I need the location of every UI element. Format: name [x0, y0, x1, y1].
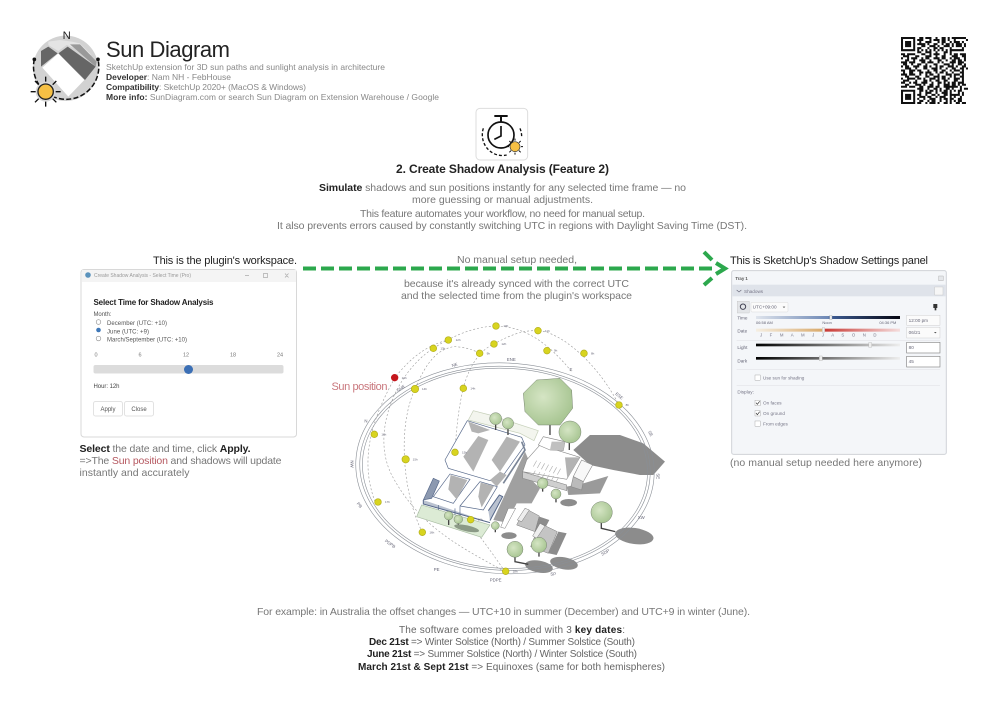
hour slider: 0 — [94, 352, 98, 358]
neighbouring house — [523, 437, 593, 491]
header information text: Developer: Nam NH - FebHouse — [106, 72, 231, 82]
hour slider: 6 — [138, 352, 142, 358]
key dates text block: June 21st => Summer Solstice (North) / Winter Solstice (South) — [367, 649, 637, 660]
panel: SketchUp shadow settings — [732, 271, 946, 454]
heading: plugin workspace: This is the plugin's workspace. — [153, 255, 297, 267]
month radio options: Month: — [94, 312, 112, 318]
compass labels: ESE — [614, 391, 624, 401]
compass labels: ENE — [507, 357, 516, 362]
logo: sun diagram — [31, 30, 100, 107]
header information text: SketchUp extension for 3D sun paths and sunlight analysis in architecture — [106, 62, 385, 72]
intro text block: Simulate shadows and sun positions instantly for any selected time frame — no — [319, 182, 686, 194]
intro text block: This feature automates your workflow, no need for manual setup. — [360, 208, 645, 220]
sun marker labels: 15h — [413, 457, 418, 461]
compass labels: PDPB — [384, 538, 397, 549]
display checkboxes: Use sun for shading — [763, 375, 805, 380]
key dates text block: Dec 21st => Winter Solstice (North) / Summer Solstice (South) — [369, 637, 635, 648]
sun position label: Sun position — [332, 381, 388, 393]
display checkboxes: From edges — [763, 421, 789, 426]
key dates text block — [358, 625, 665, 673]
sun marker labels — [381, 324, 629, 573]
sun position marker — [391, 374, 407, 381]
arrow annotation text: No manual setup needed, — [457, 254, 577, 266]
plugin instructions text: =>The Sun position and shadows will update — [80, 455, 282, 467]
sun marker labels: 8h — [591, 351, 595, 355]
icon: stopwatch and sun — [476, 108, 528, 160]
sun marker labels: 11h — [545, 329, 550, 333]
intro text block — [277, 182, 747, 232]
shadows section bar: Shadows — [744, 289, 764, 294]
panel: plugin window — [81, 270, 296, 437]
intro text block: It also prevents errors caused by constantly switching UTC in regions with Daylight Saving Time (DST). — [277, 220, 747, 232]
compass labels: SDP — [600, 548, 610, 557]
time and date sliders: 06:58 AM — [756, 320, 773, 325]
sun marker labels: 10h — [503, 324, 509, 328]
hour readout: Hour: 12h — [94, 384, 120, 390]
key dates text block: The software comes preloaded with 3 key dates: — [399, 625, 625, 636]
compass labels: SE — [647, 430, 654, 437]
hour slider: 24 — [277, 352, 283, 358]
header information text: More info: SunDiagram.com or search Sun Diagram on Extension Warehouse / Google — [106, 92, 439, 102]
sun position marker: 13h — [402, 376, 407, 380]
time and date sliders: Noon — [822, 320, 832, 325]
header information text: Compatibility: SketchUp 2020+ (MacOS & Windows) — [106, 82, 306, 92]
month radio options — [94, 312, 187, 344]
compass labels: N — [364, 419, 368, 424]
time and date sliders: Date — [737, 329, 748, 334]
compass labels — [350, 357, 661, 583]
light and dark sliders: Light — [737, 345, 748, 350]
compass rings — [350, 355, 660, 581]
month radio options: June (UTC: +9) — [107, 330, 149, 336]
plugin instructions text: Select the date and time, click Apply. — [80, 443, 251, 455]
sun marker labels: 14h — [470, 386, 476, 390]
plugin instructions text: instantly and accurately — [80, 467, 190, 479]
sun path diagram — [350, 323, 665, 583]
sun marker labels: 16h — [429, 530, 435, 534]
compass labels: NNE — [396, 384, 406, 393]
panel caption: (no manual setup needed here anymore) — [730, 457, 922, 469]
lower wing — [423, 474, 503, 523]
sun marker labels: 9h — [487, 351, 490, 355]
time and date sliders: 04:36 PM — [879, 320, 896, 325]
small outbuildings — [501, 508, 557, 553]
time and date sliders — [737, 315, 940, 338]
QR code — [901, 38, 968, 103]
sun marker labels: 12h — [456, 338, 461, 342]
compass labels: E — [570, 367, 573, 372]
trees — [444, 378, 615, 564]
lots — [417, 505, 490, 537]
time zone selector — [737, 301, 937, 313]
key dates text block: March 21st & Sept 21st => Equinoxes (same for both hemispheres) — [358, 662, 665, 673]
sun marker labels: 15h — [462, 450, 467, 454]
arrow: plugin to SketchUp — [303, 252, 725, 285]
heading: shadow settings panel: This is SketchUp's Shadow Settings panel — [730, 255, 928, 267]
section heading: 2. Create Shadow Analysis (Feature 2) — [396, 162, 609, 176]
sun marker labels: 18h — [513, 569, 518, 573]
apply and close buttons — [94, 402, 154, 416]
upper wing — [445, 421, 525, 487]
compass labels: SP — [550, 572, 556, 577]
apply and close buttons: Apply — [100, 407, 116, 413]
window title bar: Create Shadow Analysis - Select Time (Pro) — [94, 273, 191, 279]
main house — [417, 411, 538, 537]
sun marker labels: 8h — [626, 403, 629, 407]
time and date sliders: 06/21 — [909, 330, 921, 335]
display checkboxes: Display: — [737, 390, 754, 395]
sun marker labels: 17h — [385, 500, 390, 504]
apply and close buttons: Close — [131, 407, 147, 413]
title: Sun Diagram — [106, 37, 230, 62]
intro text block: more guessing or manual adjustments. — [412, 194, 593, 206]
compass labels: PDPE — [490, 578, 502, 583]
display checkboxes: On faces — [763, 401, 782, 406]
sun path markers — [371, 323, 622, 575]
arrow annotation text — [401, 254, 632, 302]
plugin instructions text — [80, 443, 282, 479]
arrow annotation text: because it's already synced with the correct UTC — [404, 278, 629, 290]
sun marker labels: 12h — [501, 342, 507, 346]
sun marker labels: 13h — [440, 346, 446, 350]
hour slider — [94, 352, 284, 374]
sun marker labels: 14h — [422, 387, 427, 391]
month radio options: March/September (UTC: +10) — [107, 338, 187, 344]
compass labels: PB — [356, 501, 363, 509]
display checkboxes: On ground — [763, 411, 785, 416]
example text: For example: in Australia the offset changes — UTC+10 in summer (December) and UTC+9 in winter (June). — [257, 606, 750, 618]
display checkboxes — [737, 375, 940, 426]
month radio options: December (UTC: +10) — [107, 321, 167, 327]
compass labels: NE — [451, 362, 458, 368]
sun marker labels: 9h — [554, 349, 558, 353]
logo: sun diagram: N — [63, 30, 71, 42]
time and date sliders: Time — [737, 316, 748, 321]
tray header — [735, 276, 943, 281]
shadows section bar — [732, 285, 946, 296]
light and dark sliders — [737, 341, 940, 369]
time and date sliders: J F M A M J J A S O N D — [760, 333, 877, 338]
tray header: Tray 1 — [735, 276, 748, 281]
time and date sliders: 12:00 pm — [909, 318, 928, 323]
compass labels: SE — [656, 473, 661, 479]
sun marker labels: 16h — [381, 432, 387, 436]
arrow annotation text: and the selected time from the plugin's workspace — [401, 290, 632, 302]
time zone selector: UTC+09:00 — [753, 305, 777, 310]
hour slider: 12 — [183, 352, 189, 358]
compass labels: XW — [638, 515, 646, 520]
window heading: Select Time for Shadow Analysis — [94, 298, 214, 307]
sun marker labels: 16h — [478, 518, 483, 522]
ground shadows — [493, 435, 665, 575]
hour slider: 18 — [230, 352, 236, 358]
compass labels: NW — [350, 460, 355, 469]
compass labels: PE — [434, 567, 440, 572]
sun path arcs — [368, 326, 619, 572]
window title bar — [82, 270, 296, 282]
light and dark sliders: 45 — [909, 359, 914, 364]
light and dark sliders: 80 — [909, 345, 914, 350]
header information text — [106, 62, 439, 102]
light and dark sliders: Dark — [737, 359, 748, 364]
